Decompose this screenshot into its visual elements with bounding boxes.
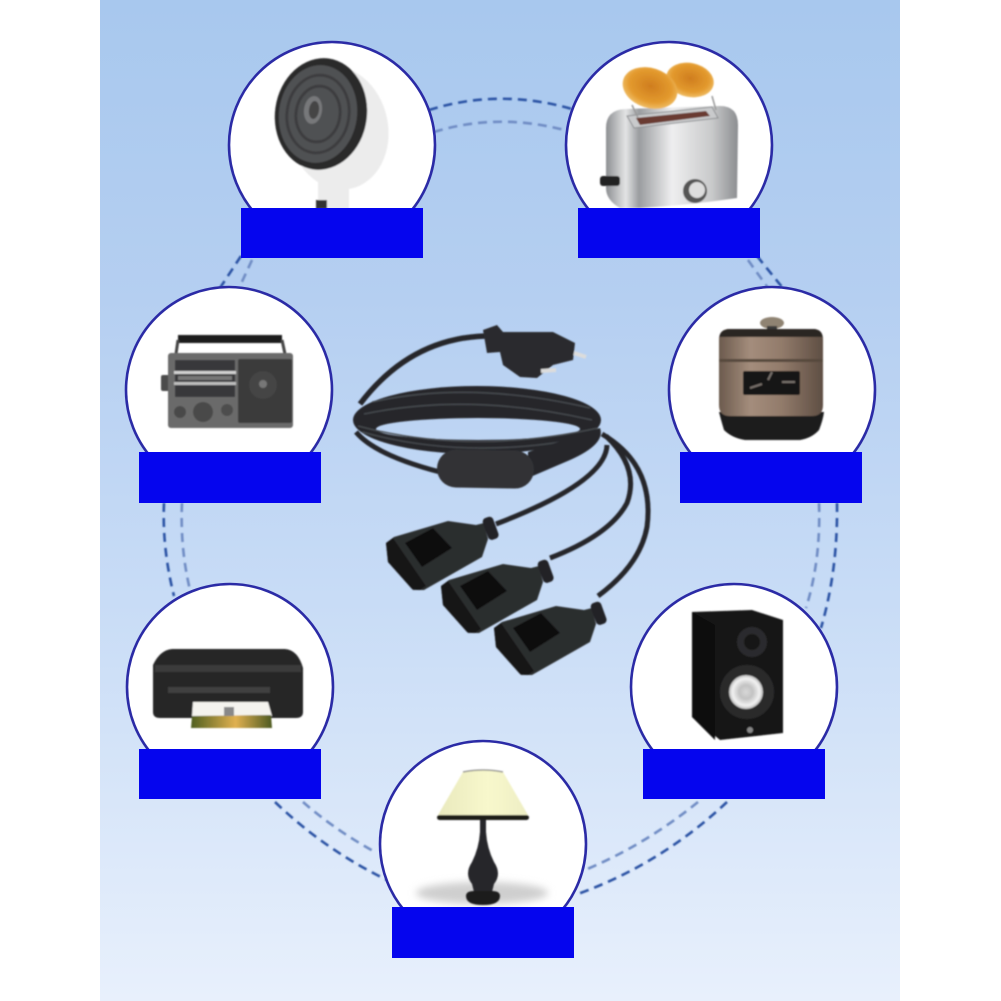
outlet 1 [386,516,500,590]
lower cord strand [356,432,440,472]
icon: desk fan [268,52,400,210]
icon: printer [153,649,303,728]
dashed connector rings [164,99,837,895]
label bar: printer [139,749,321,799]
icon: table lamp [416,770,548,905]
branch cords [496,434,648,596]
panel: toaster [566,42,772,258]
outlet 2 [441,559,555,633]
icon: radio [161,335,293,428]
panel: printer [127,584,333,799]
input cord [360,336,486,404]
panel: table lamp [380,741,586,958]
central product: three-way power cable [353,325,648,675]
icon: toaster with bread [600,58,738,208]
label bar: rice cooker [680,452,862,503]
panel: speaker [631,584,837,799]
icon: rice cooker [719,317,824,440]
panel: rice cooker [669,287,875,503]
cable coil [353,386,601,454]
panel: fan [229,42,435,258]
label bar: radio [139,452,321,503]
label bar: table lamp [392,907,574,958]
outlet 3 [494,601,608,675]
label bar: toaster [578,208,760,258]
plug [483,325,586,378]
icon: bookshelf speaker [692,610,783,740]
merged cord band right of switch [528,428,601,478]
inline switch [437,449,534,489]
background panel [100,0,900,1001]
label bar: speaker [643,749,825,799]
label bar: fan [241,208,423,258]
panel: radio [126,287,332,503]
